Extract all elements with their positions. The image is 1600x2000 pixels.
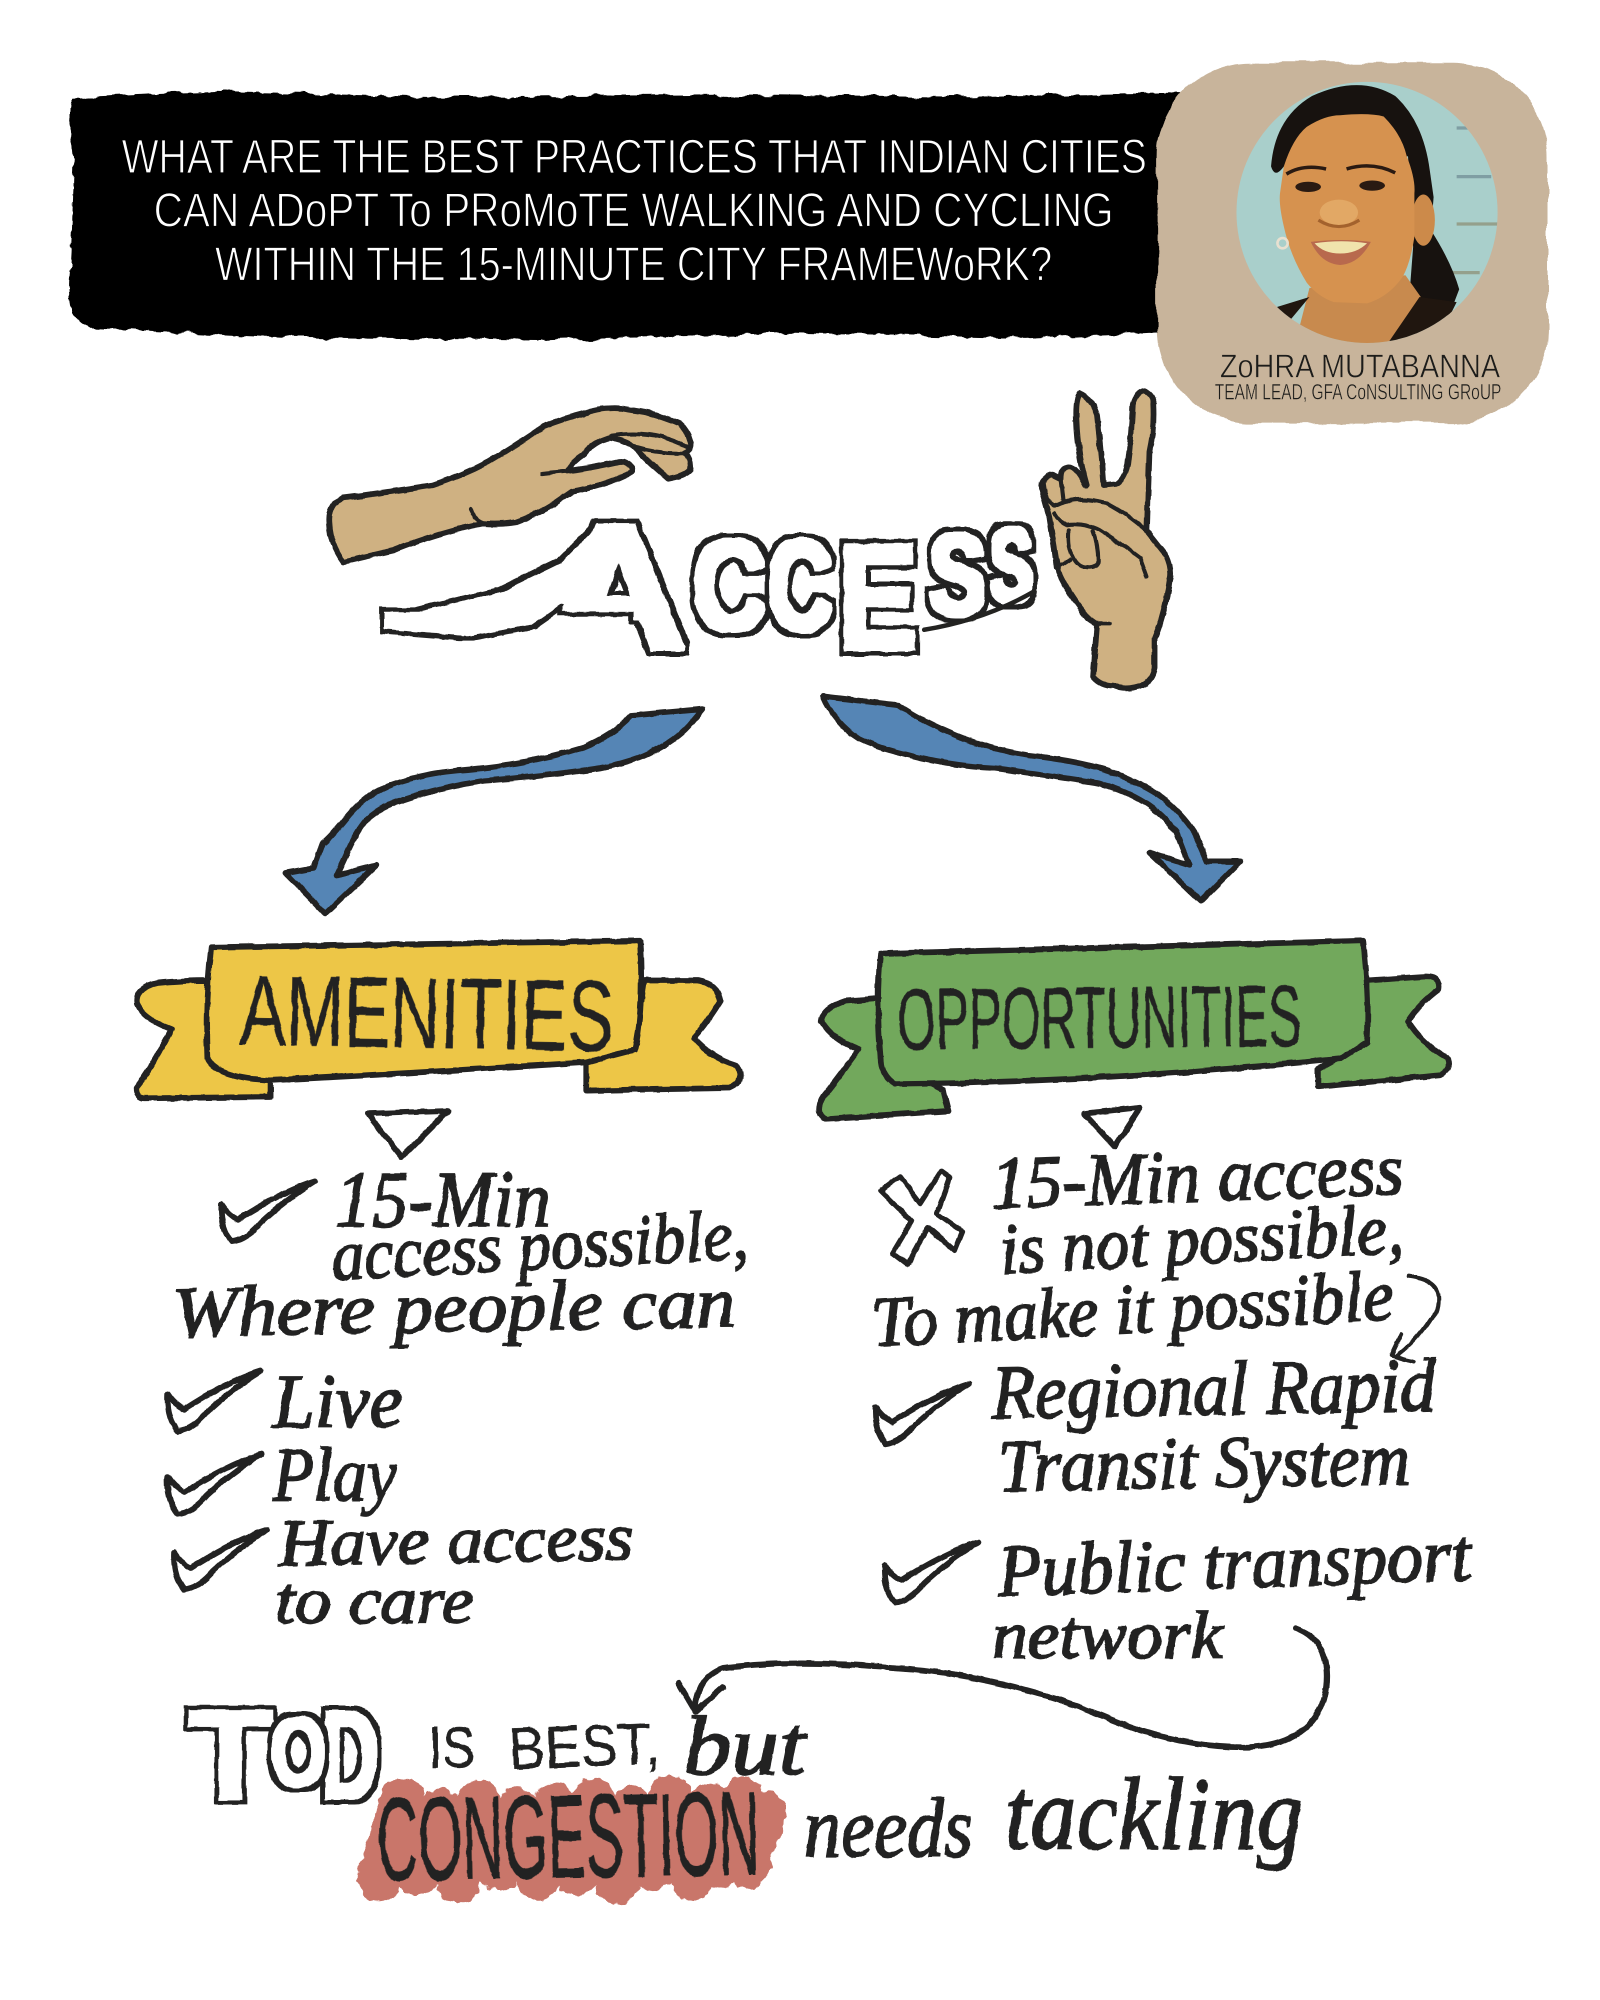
- title: ACCESS: C: [692, 515, 767, 658]
- text: have access: Have access: [277, 1501, 634, 1580]
- text: 15-Min: 15-Min: [335, 1156, 550, 1244]
- title: ACCESS: A: [544, 487, 687, 687]
- text: 15-min access: 15-Min access: [990, 1129, 1405, 1225]
- text: public transport: Public transport: [995, 1515, 1475, 1613]
- question text: WITHIN THE 15-MINUTE CITY FRAMEWoRK?: [215, 237, 1052, 291]
- question text: [122, 130, 1147, 291]
- ribbon: opportunities: [819, 941, 1449, 1119]
- question text: CAN ADoPT To PRoMoTE WALKING AND CYCLING: [154, 184, 1114, 238]
- speaker name: ZoHRA MUTABANNA: [1220, 349, 1501, 386]
- text: to care: to care: [275, 1565, 474, 1638]
- text: is best, but: [429, 1700, 808, 1793]
- ribbon label: OPPORTUNITIES: OPPORTUNITIES: [897, 968, 1302, 1069]
- arrow: curled: [1391, 1276, 1439, 1362]
- arrow: curved to conclusion: [678, 1628, 1327, 1747]
- opportunities list: [870, 1129, 1475, 1673]
- icon: tick: [884, 1542, 978, 1603]
- text: TOD: [188, 1683, 379, 1825]
- text: live: Live: [272, 1359, 403, 1444]
- title: ACCESS: [379, 518, 1038, 657]
- question text: WHAT ARE THE BEST PRACTICES THAT INDIAN CITIES: [122, 130, 1147, 184]
- portrait photo: [1236, 82, 1498, 343]
- text: needs tackling: needs: [804, 1782, 973, 1875]
- text: access possible: access possible,: [329, 1194, 750, 1296]
- conclusion: CONGESTION: [376, 1767, 761, 1905]
- text: TOD: D: [321, 1683, 379, 1825]
- pointer triangle: amenities: [367, 1111, 448, 1157]
- header banner: [69, 91, 1197, 340]
- ribbon: amenities: [136, 941, 740, 1098]
- text: regional rapid: Regional Rapid: [990, 1342, 1437, 1435]
- icon: tick: [875, 1384, 969, 1444]
- arrow: to amenities: [285, 709, 703, 914]
- text: is not possible: is not possible,: [998, 1189, 1406, 1290]
- text: play: Play: [272, 1432, 398, 1517]
- text: TOD: T: [188, 1683, 273, 1825]
- text: network: network: [992, 1600, 1224, 1673]
- pointer triangle: opportunities: [1084, 1107, 1140, 1147]
- icon: reaching hand: [329, 408, 691, 562]
- title: ACCESS: C: [768, 515, 832, 658]
- text: to make it possible: To make it possible: [870, 1255, 1395, 1363]
- icon: tick: [221, 1181, 315, 1242]
- title: ACCESS: S: [929, 511, 986, 639]
- text: needs tackling: tackling: [1005, 1758, 1303, 1871]
- conclusion: [188, 1683, 1303, 1905]
- text: TOD: O: [270, 1698, 326, 1807]
- icon: tick: [168, 1371, 261, 1431]
- icon: peace-sign hand: [1041, 390, 1171, 688]
- speaker panel: [1157, 63, 1548, 424]
- highlight: congestion: [379, 1797, 764, 1882]
- text: needs tackling: [804, 1758, 1303, 1875]
- icon: tick: [168, 1454, 261, 1514]
- text: is best, but: but: [684, 1700, 808, 1793]
- icon: cross: [881, 1171, 963, 1265]
- text: is best, but: IS: [429, 1716, 475, 1781]
- text: is best, but: BEST,: [508, 1712, 661, 1782]
- arrow: to opportunities: [823, 696, 1240, 901]
- amenities list: [168, 1156, 750, 1638]
- title: ACCESS: S: [989, 508, 1033, 625]
- text: transit system: Transit System: [997, 1419, 1411, 1508]
- icon: tick: [174, 1530, 268, 1590]
- text: where people can: Where people can: [172, 1263, 736, 1352]
- ribbon label: AMENITIES: AMENITIES: [239, 955, 615, 1073]
- title: ACCESS: E: [838, 513, 918, 681]
